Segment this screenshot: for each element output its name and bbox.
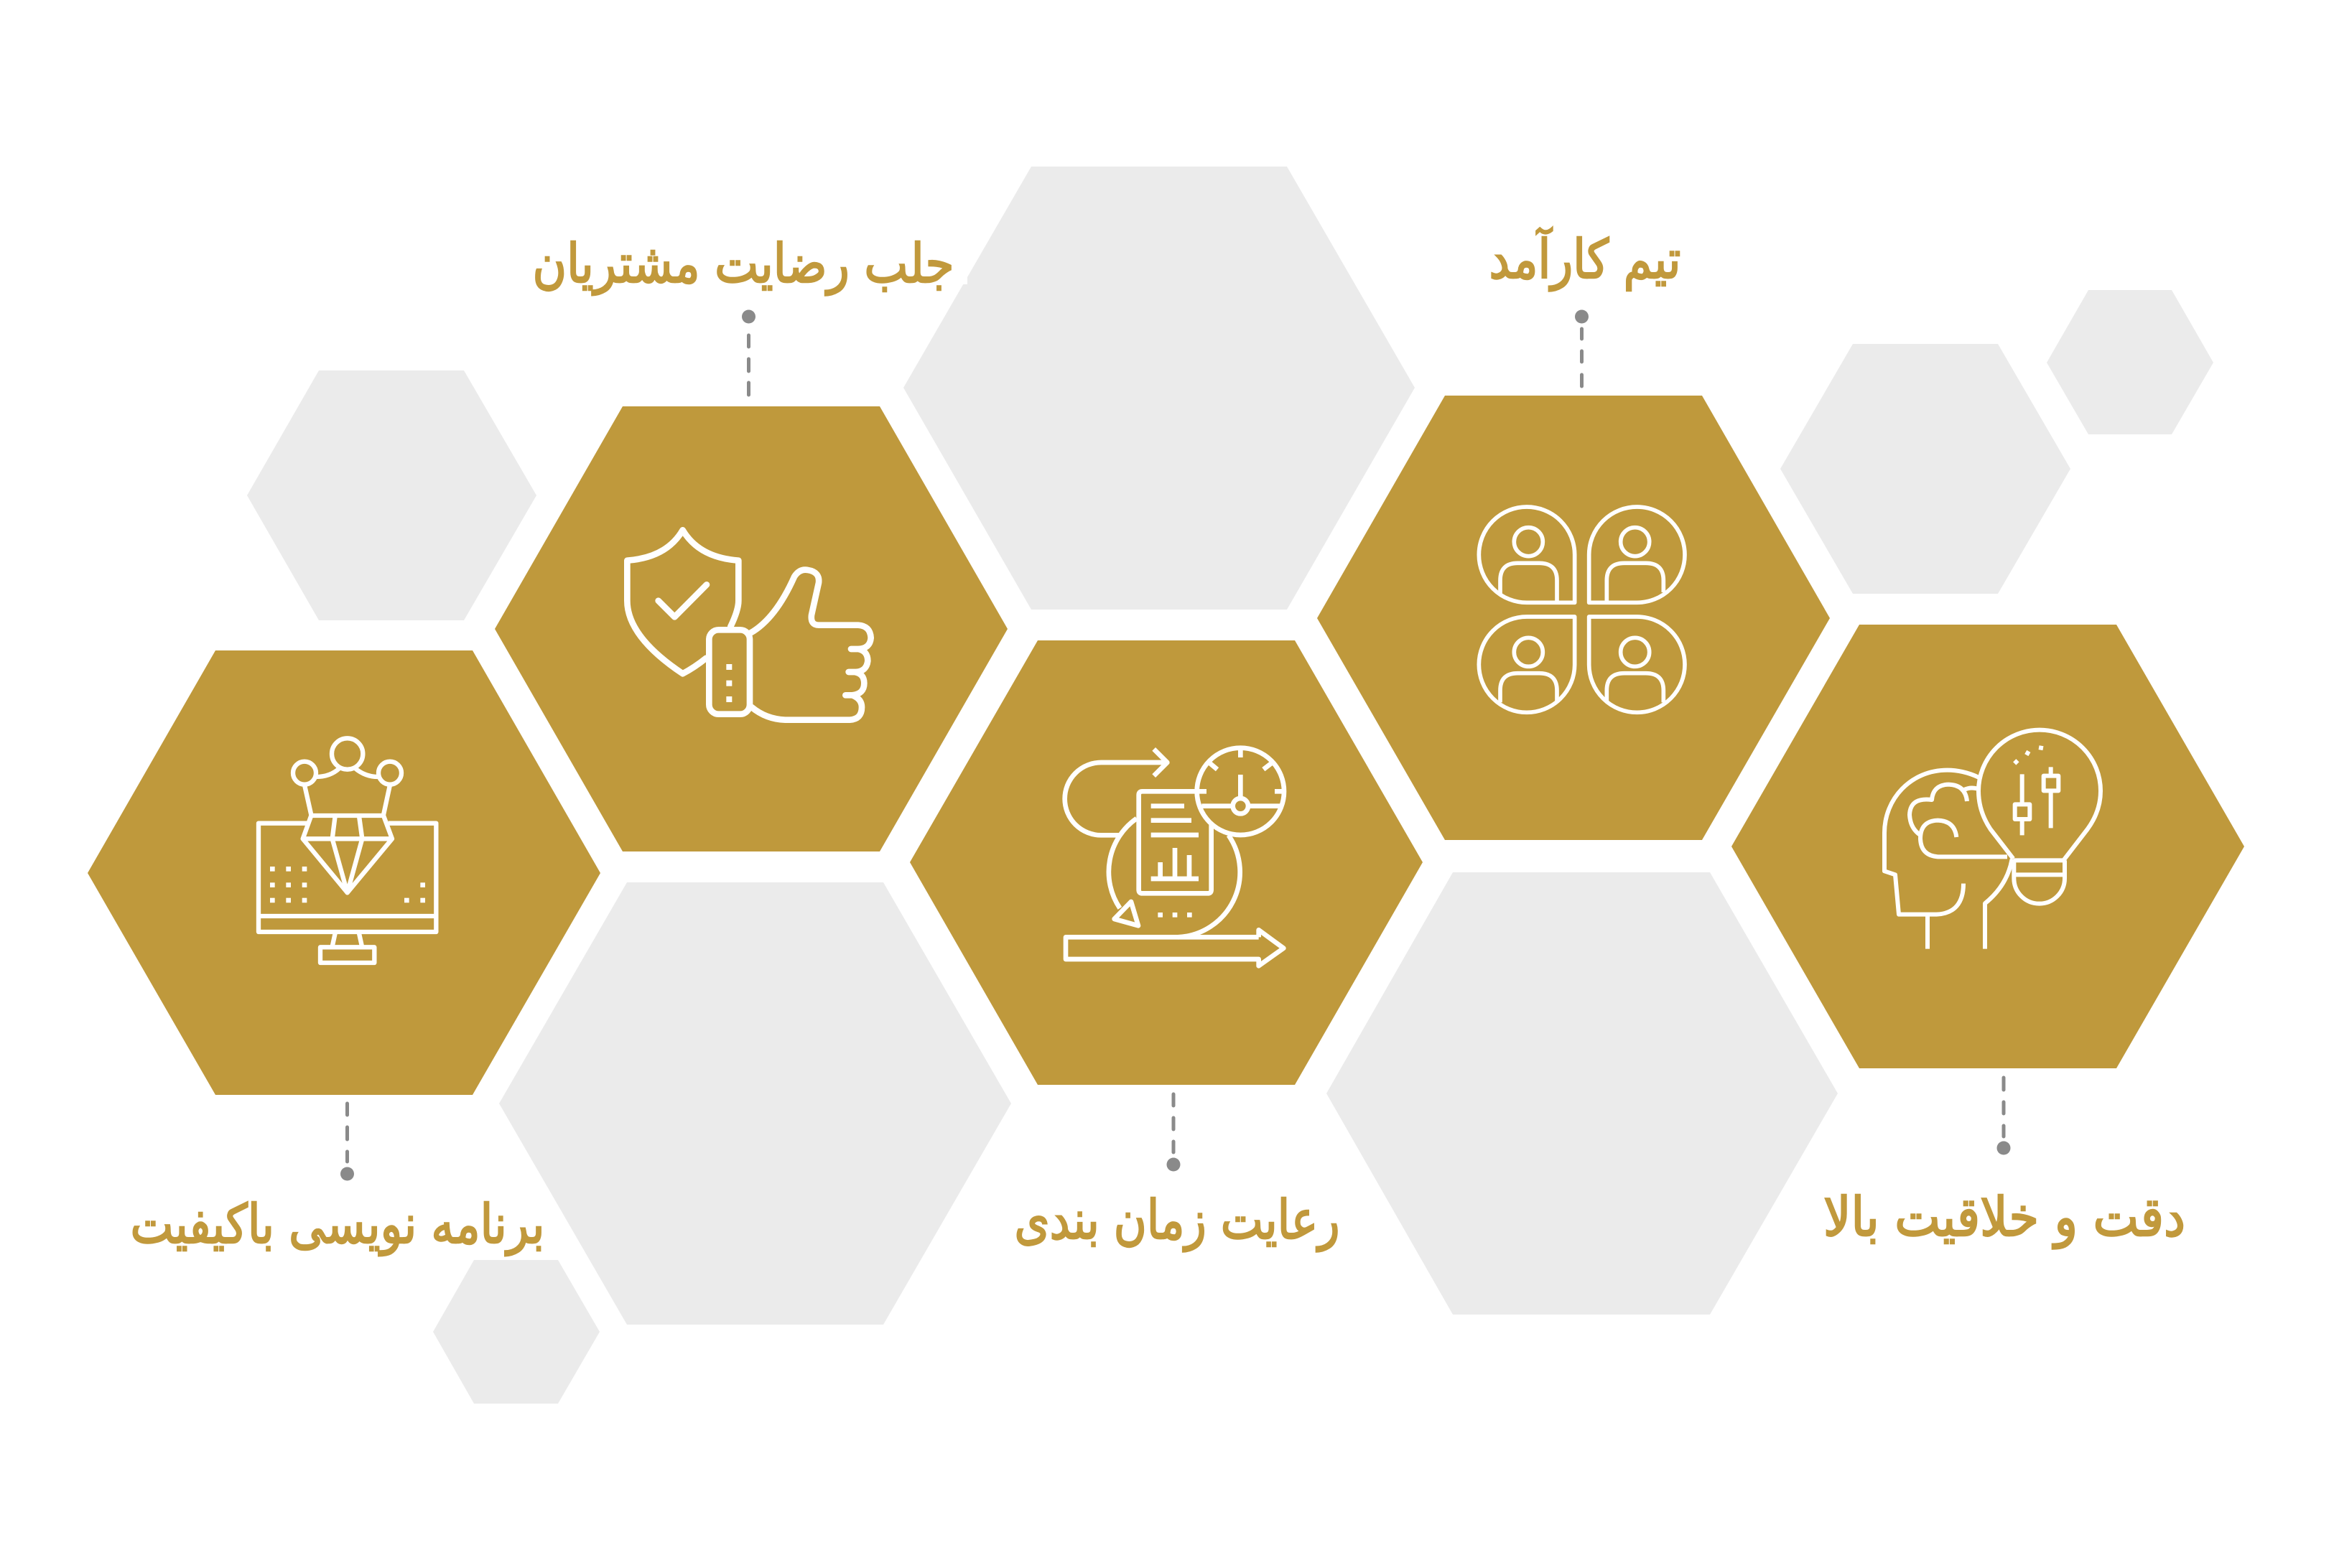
icon: head and light bulb — [1884, 730, 2101, 949]
connector: quality programming — [340, 1103, 354, 1180]
connector: timeliness — [1166, 1094, 1181, 1172]
white text backing notch — [934, 266, 967, 284]
gold hexagon 3: timeliness — [910, 640, 1423, 1085]
icon: monitor with diamond — [259, 738, 436, 963]
gold hexagon 2: customer satisfaction — [495, 406, 1008, 851]
connector: accuracy and creativity — [1996, 1078, 2011, 1154]
gold hexagon 1: quality programming — [88, 650, 600, 1095]
label: quality programming: برنامه نویسی باکیفیت — [131, 1193, 544, 1256]
grey hexagon: upper left small — [247, 370, 536, 620]
label: accuracy and creativity: دقت و خلاقیت بالا — [1823, 1185, 2185, 1249]
gold hexagon 4: efficient team — [1317, 396, 1830, 840]
grey hexagon: upper right tiny — [2047, 290, 2213, 434]
grey hexagon: bottom right large — [1326, 872, 1838, 1315]
gold hexagon 5: accuracy and creativity — [1731, 625, 2244, 1068]
icon: report, clock and arrows — [1065, 748, 1284, 966]
grey hexagon: upper right medium — [1780, 344, 2070, 594]
icon: four team members — [1479, 507, 1685, 712]
grey hexagon: bottom left large — [499, 882, 1011, 1325]
label: efficient team: تیم کارآمد — [1489, 227, 1680, 291]
label: customer satisfaction: جلب رضایت مشتریان — [533, 232, 954, 295]
icon: shield and thumbs up — [627, 530, 871, 720]
connector: customer satisfaction — [742, 310, 755, 395]
grey hexagon: top centre large — [903, 167, 1415, 610]
grey hexagon: bottom tiny — [433, 1260, 600, 1404]
connector: efficient team — [1575, 310, 1589, 386]
label: timeliness: رعایت زمان بندی — [1014, 1188, 1340, 1251]
